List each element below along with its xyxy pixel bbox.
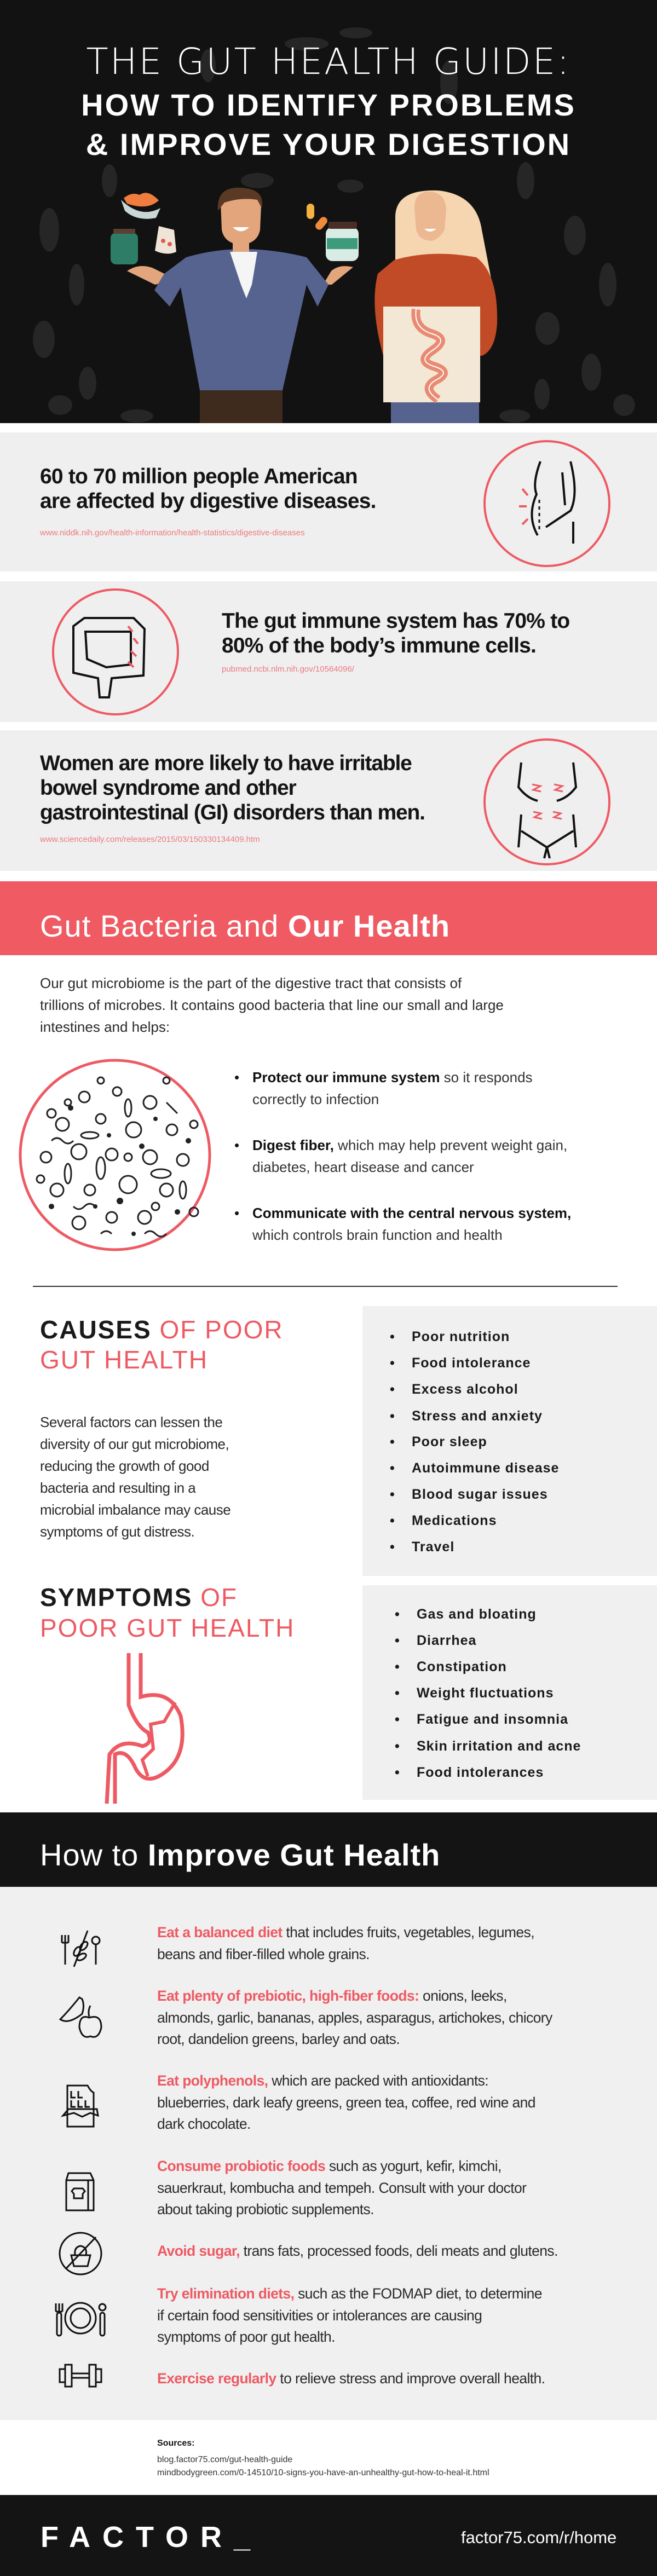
causes list panel: Food intolerance [412, 1355, 531, 1371]
symptoms heading: SYMPTOMS OF [40, 1583, 238, 1612]
causes list panel [362, 1306, 657, 1576]
illustration: man and woman [111, 187, 497, 423]
bullet list: benefits: Protect our immune system so it responds [252, 1069, 533, 1085]
icon: banana and apple [59, 1996, 102, 2038]
icon: intestine in circle [52, 588, 179, 715]
intro text [40, 975, 504, 1035]
bullet list: benefits: diabetes, heart disease and cancer [252, 1159, 474, 1175]
symptoms list panel: Constipation [417, 1659, 507, 1674]
causes paragraph: Several factors can lessen the [40, 1414, 222, 1430]
icon: milk carton [66, 2172, 94, 2211]
causes paragraph: symptoms of gut distress. [40, 1523, 194, 1540]
bullet list: benefits: Communicate with the central nervous system, [252, 1205, 571, 1221]
icon: dumbbell [59, 2364, 102, 2388]
title: THE GUT HEALTH GUIDE: [86, 41, 571, 83]
tip 1 [157, 1924, 534, 1962]
stat panel 3 [0, 730, 657, 871]
tip 1: beans and fiber-filled whole grains. [157, 1945, 370, 1962]
banner: Gut Bacteria and Our Health [0, 881, 657, 955]
tip 4: about taking probiotic supplements. [157, 2201, 374, 2217]
banner: How to Improve Gut Health: How to Improve Gut Health [40, 1838, 440, 1872]
title: HOW TO IDENTIFY PROBLEMS [81, 88, 576, 122]
symptoms list panel: Gas and bloating [417, 1607, 537, 1622]
causes list panel: Travel [412, 1539, 454, 1555]
tip 5: Avoid sugar, trans fats, processed foods, deli meats and glutens. [157, 2243, 558, 2259]
improve tips panel [0, 1887, 657, 2420]
footer url: factor75.com/r/home [461, 2528, 616, 2547]
bullet list: benefits: which controls brain function and health [252, 1227, 503, 1243]
causes paragraph: bacteria and resulting in a [40, 1480, 195, 1496]
sources: Sources: [157, 2439, 194, 2448]
tip 2: root, dandelion greens, barley and oats. [157, 2031, 400, 2047]
tip 6: Try elimination diets, such as the FODMAP diet, to determine [157, 2285, 542, 2302]
causes paragraph [40, 1414, 230, 1540]
bullet list: benefits: correctly to infection [252, 1091, 379, 1107]
sources [157, 2439, 489, 2477]
sources: mindbodygreen.com/0-14510/10-signs-you-have-an-unhealthy-gut-how-to-heal-it.html [157, 2468, 489, 2477]
tip 2: Eat plenty of prebiotic, high-fiber foods: onions, leeks, [157, 1988, 507, 2004]
symptoms heading: POOR GUT HEALTH [40, 1614, 295, 1642]
tip 3: dark chocolate. [157, 2116, 251, 2132]
icon: pregnant belly in circle [483, 440, 610, 567]
icon: cramping abdomen in circle [483, 738, 610, 865]
symptoms list panel: Diarrhea [417, 1633, 476, 1648]
causes list panel: Autoimmune disease [412, 1460, 559, 1476]
causes list panel: Medications [412, 1513, 497, 1528]
title: & IMPROVE YOUR DIGESTION [86, 127, 571, 161]
causes list panel: Stress and anxiety [412, 1408, 543, 1424]
source url: www.sciencedaily.com/releases/2015/03/150330134409.htm [40, 835, 260, 844]
stat text: Women are more likely to have irritable [40, 752, 412, 775]
causes heading [40, 1315, 284, 1374]
tip 2: almonds, garlic, bananas, apples, asparagus, artichokes, chicory [157, 2009, 552, 2025]
footer [0, 2495, 657, 2576]
tip 2 [157, 1988, 553, 2047]
symptoms heading [40, 1583, 295, 1642]
tip 1: Eat a balanced diet that includes fruits, vegetables, legumes, [157, 1924, 534, 1940]
title [81, 41, 576, 161]
logo: FACTOR_: FACTOR_ [41, 2521, 262, 2554]
causes paragraph: microbial imbalance may cause [40, 1501, 230, 1518]
symptoms list panel [362, 1585, 657, 1800]
causes heading: CAUSES OF POOR [40, 1315, 284, 1344]
banner: How to Improve Gut Health [0, 1812, 657, 1887]
icon: microbe circle [19, 1059, 211, 1251]
causes list panel: Excess alcohol [412, 1382, 518, 1397]
causes paragraph: diversity of our gut microbiome, [40, 1436, 229, 1452]
stat text: The gut immune system has 70% to [222, 609, 569, 633]
icon: plate and cutlery [55, 2302, 106, 2336]
causes list panel: Blood sugar issues [412, 1487, 548, 1502]
stat text [40, 752, 425, 824]
stat panel 2 [0, 581, 657, 722]
causes heading: GUT HEALTH [40, 1345, 208, 1374]
source url: pubmed.ncbi.nlm.nih.gov/10564096/ [222, 665, 354, 674]
symptoms list panel: Skin irritation and acne [417, 1738, 581, 1754]
stat text: are affected by digestive diseases. [40, 489, 376, 513]
tip 7: Exercise regularly to relieve stress and improve overall health. [157, 2370, 545, 2387]
causes list panel: Poor sleep [412, 1434, 487, 1449]
tip 3: Eat polyphenols, which are packed with antioxidants: [157, 2072, 488, 2089]
header: dark hero [0, 0, 657, 423]
tip 4 [157, 2158, 527, 2217]
tip 3 [157, 2072, 535, 2132]
icon: balanced diet [61, 1930, 101, 1967]
source url: www.niddk.nih.gov/health-information/health-statistics/digestive-diseases [40, 528, 305, 538]
tip 6: symptoms of poor gut health. [157, 2329, 335, 2345]
tip 4: sauerkraut, kombucha and tempeh. Consult with your doctor [157, 2180, 526, 2196]
tip 6 [157, 2285, 542, 2345]
symptoms list panel: Weight fluctuations [417, 1685, 554, 1701]
stat text: bowel syndrome and other [40, 776, 296, 800]
tip 4: Consume probiotic foods such as yogurt, kefir, kimchi, [157, 2158, 502, 2174]
tip 6: if certain food sensitivities or intolerances are causing [157, 2307, 482, 2323]
stat text [222, 609, 569, 657]
tip 3: blueberries, dark leafy greens, green tea, coffee, red wine and [157, 2094, 535, 2111]
sources: blog.factor75.com/gut-health-guide [157, 2455, 292, 2464]
bullet list: benefits: Digest fiber, which may help prevent weight gain, [252, 1137, 567, 1153]
stat text: gastrointestinal (GI) disorders than men. [40, 801, 425, 824]
banner: Gut Bacteria and Our Health: Gut Bacteria and Our Health [40, 909, 450, 943]
stat text [40, 465, 376, 513]
symptoms list panel: Food intolerances [417, 1765, 544, 1780]
icon: chocolate bar [61, 2084, 99, 2127]
stat panel 1 [0, 432, 657, 571]
icon: stomach [105, 1653, 185, 1804]
stat text: 80% of the body’s immune cells. [222, 634, 536, 657]
icon: no sugar [59, 2232, 102, 2275]
intro text: Our gut microbiome is the part of the digestive tract that consists of [40, 975, 462, 991]
intro text: intestines and helps: [40, 1019, 170, 1035]
stat text: 60 to 70 million people American [40, 465, 358, 488]
intro text: trillions of microbes. It contains good bacteria that line our small and large [40, 997, 504, 1013]
bullet list: benefits [235, 1069, 571, 1243]
causes list panel: Poor nutrition [412, 1329, 510, 1344]
causes paragraph: reducing the growth of good [40, 1458, 209, 1474]
symptoms list panel: Fatigue and insomnia [417, 1712, 568, 1727]
